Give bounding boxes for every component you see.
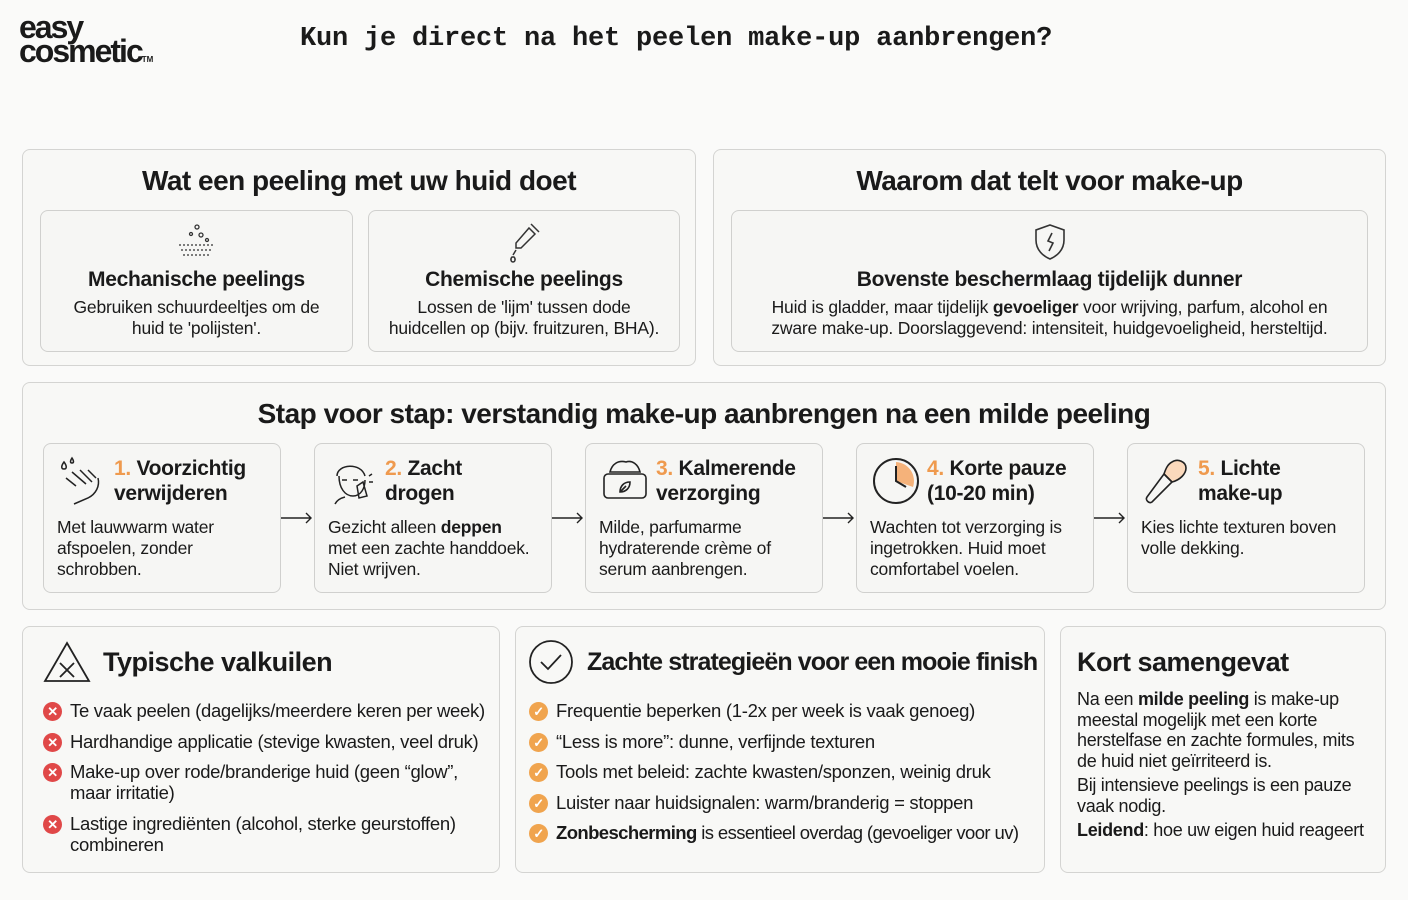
icon: brush — [1146, 460, 1187, 504]
summary text: Leidend: hoe uw eigen huid reageert — [1077, 820, 1364, 840]
step 5: Kies lichte texturen boven — [1141, 517, 1336, 537]
panel: typische valkuilen — [22, 626, 500, 873]
heading: Kort samengevat — [1077, 647, 1289, 677]
panel: typische valkuilen: ✕ — [47, 765, 58, 780]
panel: stap voor stap — [22, 382, 1386, 610]
panel: wat een peeling doet — [22, 149, 696, 366]
heading: Stap voor stap: verstandig make-up aanbrengen na een milde peeling — [258, 398, 1150, 429]
step 3: Milde, parfumarme — [599, 517, 741, 537]
step 1 — [43, 443, 281, 593]
panel: zachte strategieën: ✓ — [533, 704, 544, 719]
step 4: ingetrokken. Huid moet — [870, 538, 1046, 558]
card: mechanische — [40, 210, 353, 352]
list — [529, 700, 1018, 843]
heading: Waarom dat telt voor make-up — [856, 165, 1243, 196]
list: “Less is more”: dunne, verfijnde texturen — [556, 731, 875, 752]
panel: zachte strategieën: ✓ — [533, 765, 544, 780]
heading: Zachte strategieën voor een mooie finish — [587, 648, 1037, 676]
icon: hand water — [61, 456, 100, 505]
card: chemische: Chemische peelings — [425, 268, 623, 291]
step 4: (10-20 min) — [927, 482, 1035, 505]
panel: typische valkuilen: ✕ — [47, 735, 58, 750]
card: beschermlaag: Huid is gladder, maar tijdelijk gevoeliger voor wrijving, parfum, alcohol en — [772, 297, 1327, 317]
list: Lastige ingrediënten (alcohol, sterke geurstoffen) — [70, 813, 456, 834]
arrow — [281, 512, 312, 524]
step 4: Wachten tot verzorging is — [870, 517, 1062, 537]
step 3: serum aanbrengen. — [599, 559, 747, 579]
step 5: 5. Lichte — [1198, 457, 1280, 480]
card: mechanische: Gebruiken schuurdeeltjes om de — [74, 297, 319, 317]
card: mechanische: Mechanische peelings — [88, 268, 305, 291]
step 5: volle dekking. — [1141, 538, 1244, 558]
step 1: 1. Voorzichtig — [114, 457, 246, 480]
panel: zachte strategieën: ✓ — [533, 735, 544, 750]
step 1: verwijderen — [114, 482, 227, 505]
list: combineren — [70, 834, 164, 855]
heading: Typische valkuilen — [103, 647, 332, 677]
icon: particles — [179, 224, 213, 256]
list: Luister naar huidsignalen: warm/branderig = stoppen — [556, 792, 973, 813]
panel: kort samengevat — [1060, 626, 1386, 873]
arrow — [552, 512, 583, 524]
panel: waarom — [713, 149, 1386, 366]
list: Zonbescherming is essentieel overdag (gevoeliger voor uv) — [556, 822, 1018, 843]
step 4: comfortabel voelen. — [870, 559, 1019, 579]
step 1: afspoelen, zonder — [57, 538, 193, 558]
card: beschermlaag: Bovenste beschermlaag tijdelijk dunner — [857, 268, 1242, 291]
step 3: verzorging — [656, 482, 760, 505]
step 5: make-up — [1198, 482, 1282, 505]
card: beschermlaag — [731, 210, 1368, 352]
icon: face towel — [334, 466, 373, 504]
card: chemische — [368, 210, 680, 352]
logo: cosmeticTM — [19, 33, 153, 69]
list: maar irritatie) — [70, 782, 174, 803]
logo: easy — [19, 9, 82, 45]
arrow — [823, 512, 854, 524]
summary text: Bij intensieve peelings is een pauze vaak nodig. — [1077, 775, 1351, 816]
panel: typische valkuilen: ✕ — [47, 704, 58, 719]
panel: zachte strategieën — [515, 626, 1045, 873]
list: Te vaak peelen (dagelijks/meerdere keren per week) — [70, 700, 485, 721]
card: beschermlaag: zware make-up. Doorslaggevend: intensiteit, huidgevoeligheid, hersteltijd. — [771, 318, 1328, 338]
card: chemische: Lossen de 'lijm' tussen dode — [417, 297, 631, 317]
icon: shield — [1035, 224, 1065, 260]
summary text — [1077, 689, 1364, 840]
arrow — [1094, 512, 1125, 524]
list: Tools met beleid: zachte kwasten/sponzen, weinig druk — [556, 761, 991, 782]
logo — [19, 9, 153, 69]
step 3: 3. Kalmerende — [656, 457, 796, 480]
step 2: 2. Zacht — [385, 457, 462, 480]
list: Hardhandige applicatie (stevige kwasten, veel druk) — [70, 731, 478, 752]
step 1: schrobben. — [57, 559, 142, 579]
card: mechanische: huid te 'polijsten'. — [132, 318, 261, 338]
list — [43, 700, 485, 855]
list: Make-up over rode/branderige huid (geen “glow”, — [70, 761, 458, 782]
step 2: Niet wrijven. — [328, 559, 421, 579]
list: Frequentie beperken (1-2x per week is vaak genoeg) — [556, 700, 975, 721]
card: chemische: huidcellen op (bijv. fruitzuren, BHA). — [389, 318, 659, 338]
step 3: hydraterende crème of — [599, 538, 771, 558]
step 4 — [856, 443, 1094, 593]
icon: clock — [873, 458, 919, 504]
step 4: 4. Korte pauze — [927, 457, 1066, 480]
step 2: drogen — [385, 482, 454, 505]
step 5 — [1127, 443, 1365, 593]
icon: warning — [44, 641, 90, 682]
icon: cream jar — [603, 460, 647, 499]
step 2: met een zachte handdoek. — [328, 538, 529, 558]
panel: zachte strategieën: ✓ — [533, 796, 544, 811]
panel: typische valkuilen: ✕ — [47, 817, 58, 832]
step 2 — [314, 443, 552, 593]
step 3 — [585, 443, 823, 593]
icon: dropper — [510, 224, 540, 263]
panel: zachte strategieën: ✓ — [533, 826, 544, 841]
step 2: Gezicht alleen deppen — [328, 517, 502, 537]
step 1: Met lauwwarm water — [57, 517, 214, 537]
title: Kun je direct na het peelen make-up aanbrengen? — [300, 24, 1052, 54]
heading: Wat een peeling met uw huid doet — [142, 165, 576, 196]
summary text: Na een milde peeling is make-up meestal mogelijk met een korte herstelfase en zachte formules, mits de huid niet geïrriteerd is. — [1077, 689, 1354, 770]
icon: check circle — [529, 640, 573, 684]
